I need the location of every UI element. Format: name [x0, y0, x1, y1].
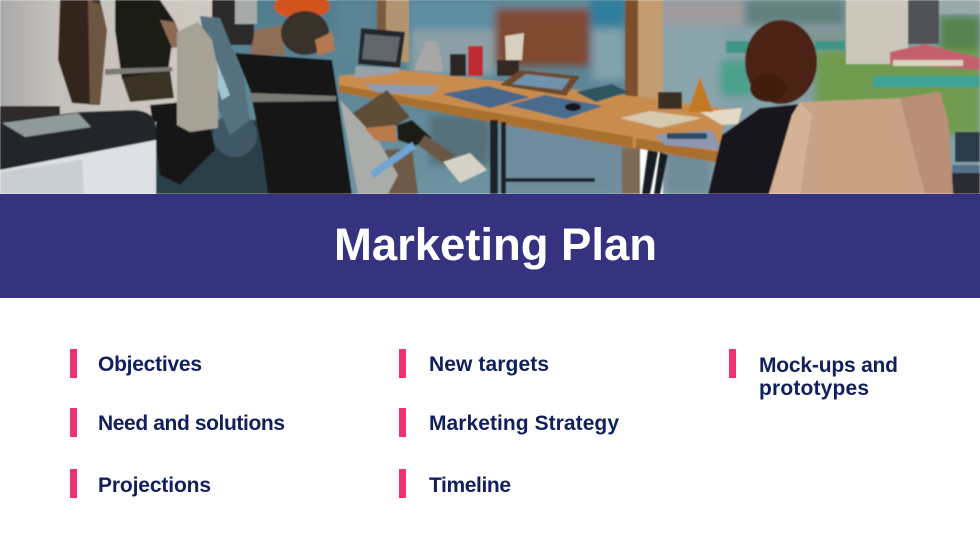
red roof	[890, 44, 980, 70]
dark ledge	[951, 172, 980, 194]
party hat	[688, 77, 713, 112]
item: New targets	[399, 349, 549, 378]
grey bag	[414, 41, 443, 72]
item: Objectives: Objectives	[98, 353, 202, 376]
backpack	[213, 113, 257, 157]
desk papers	[365, 84, 440, 95]
item: Need and solutions	[70, 408, 285, 437]
dark window frame	[212, 0, 254, 45]
item: Mock-ups and prototypes	[729, 349, 898, 400]
item: Timeline: Timeline	[429, 474, 511, 497]
window pillar left	[385, 0, 410, 63]
item: Objectives	[70, 349, 202, 378]
man's legs and shoe	[340, 90, 487, 194]
desk	[338, 69, 728, 153]
white storage cabinet	[0, 106, 156, 194]
desk legs	[490, 120, 498, 194]
woman with red hair	[274, 0, 330, 19]
laptop on desk	[358, 28, 405, 68]
grey jacket on chair	[200, 16, 250, 135]
teal roof	[873, 76, 980, 87]
red bottle	[468, 46, 483, 76]
title band	[0, 194, 980, 298]
man head	[281, 11, 329, 55]
pen holder	[658, 92, 682, 109]
item: New targets: New targets	[429, 353, 549, 376]
closed laptops	[442, 86, 530, 108]
tissue cup	[497, 60, 519, 76]
dark jar	[450, 54, 466, 76]
list column 2	[399, 349, 619, 498]
item: Need and solutions: Need and solutions	[98, 412, 285, 435]
floor	[155, 119, 270, 194]
big black chair	[235, 53, 352, 194]
item: Projections	[70, 469, 211, 498]
back wall	[0, 0, 215, 120]
item: Mock-ups and prototypes: prototypes	[759, 377, 869, 400]
notebook	[576, 84, 628, 102]
item: Projections: Projections	[98, 474, 211, 497]
item: Marketing Strategy: Marketing Strategy	[429, 412, 619, 435]
beige jacket on woman's chair	[769, 92, 953, 194]
item: Marketing Strategy	[399, 408, 619, 437]
window glass centre	[215, 0, 630, 194]
tablet tray	[500, 70, 580, 96]
window pillar right	[637, 0, 664, 100]
woman in black, seen from behind	[708, 104, 800, 194]
coat on the wall	[58, 0, 107, 105]
title: Marketing Plan	[334, 219, 657, 270]
list column 1	[70, 349, 285, 498]
city view right	[663, 0, 980, 194]
seated person in dark shirt	[115, 0, 175, 80]
list column 3	[729, 349, 898, 400]
photo: office team working at window desks	[0, 0, 980, 194]
item: Timeline	[399, 469, 511, 498]
item: Mock-ups and prototypes: Mock-ups and	[759, 354, 898, 377]
base of chair	[150, 100, 215, 185]
high-rise building	[846, 0, 908, 64]
